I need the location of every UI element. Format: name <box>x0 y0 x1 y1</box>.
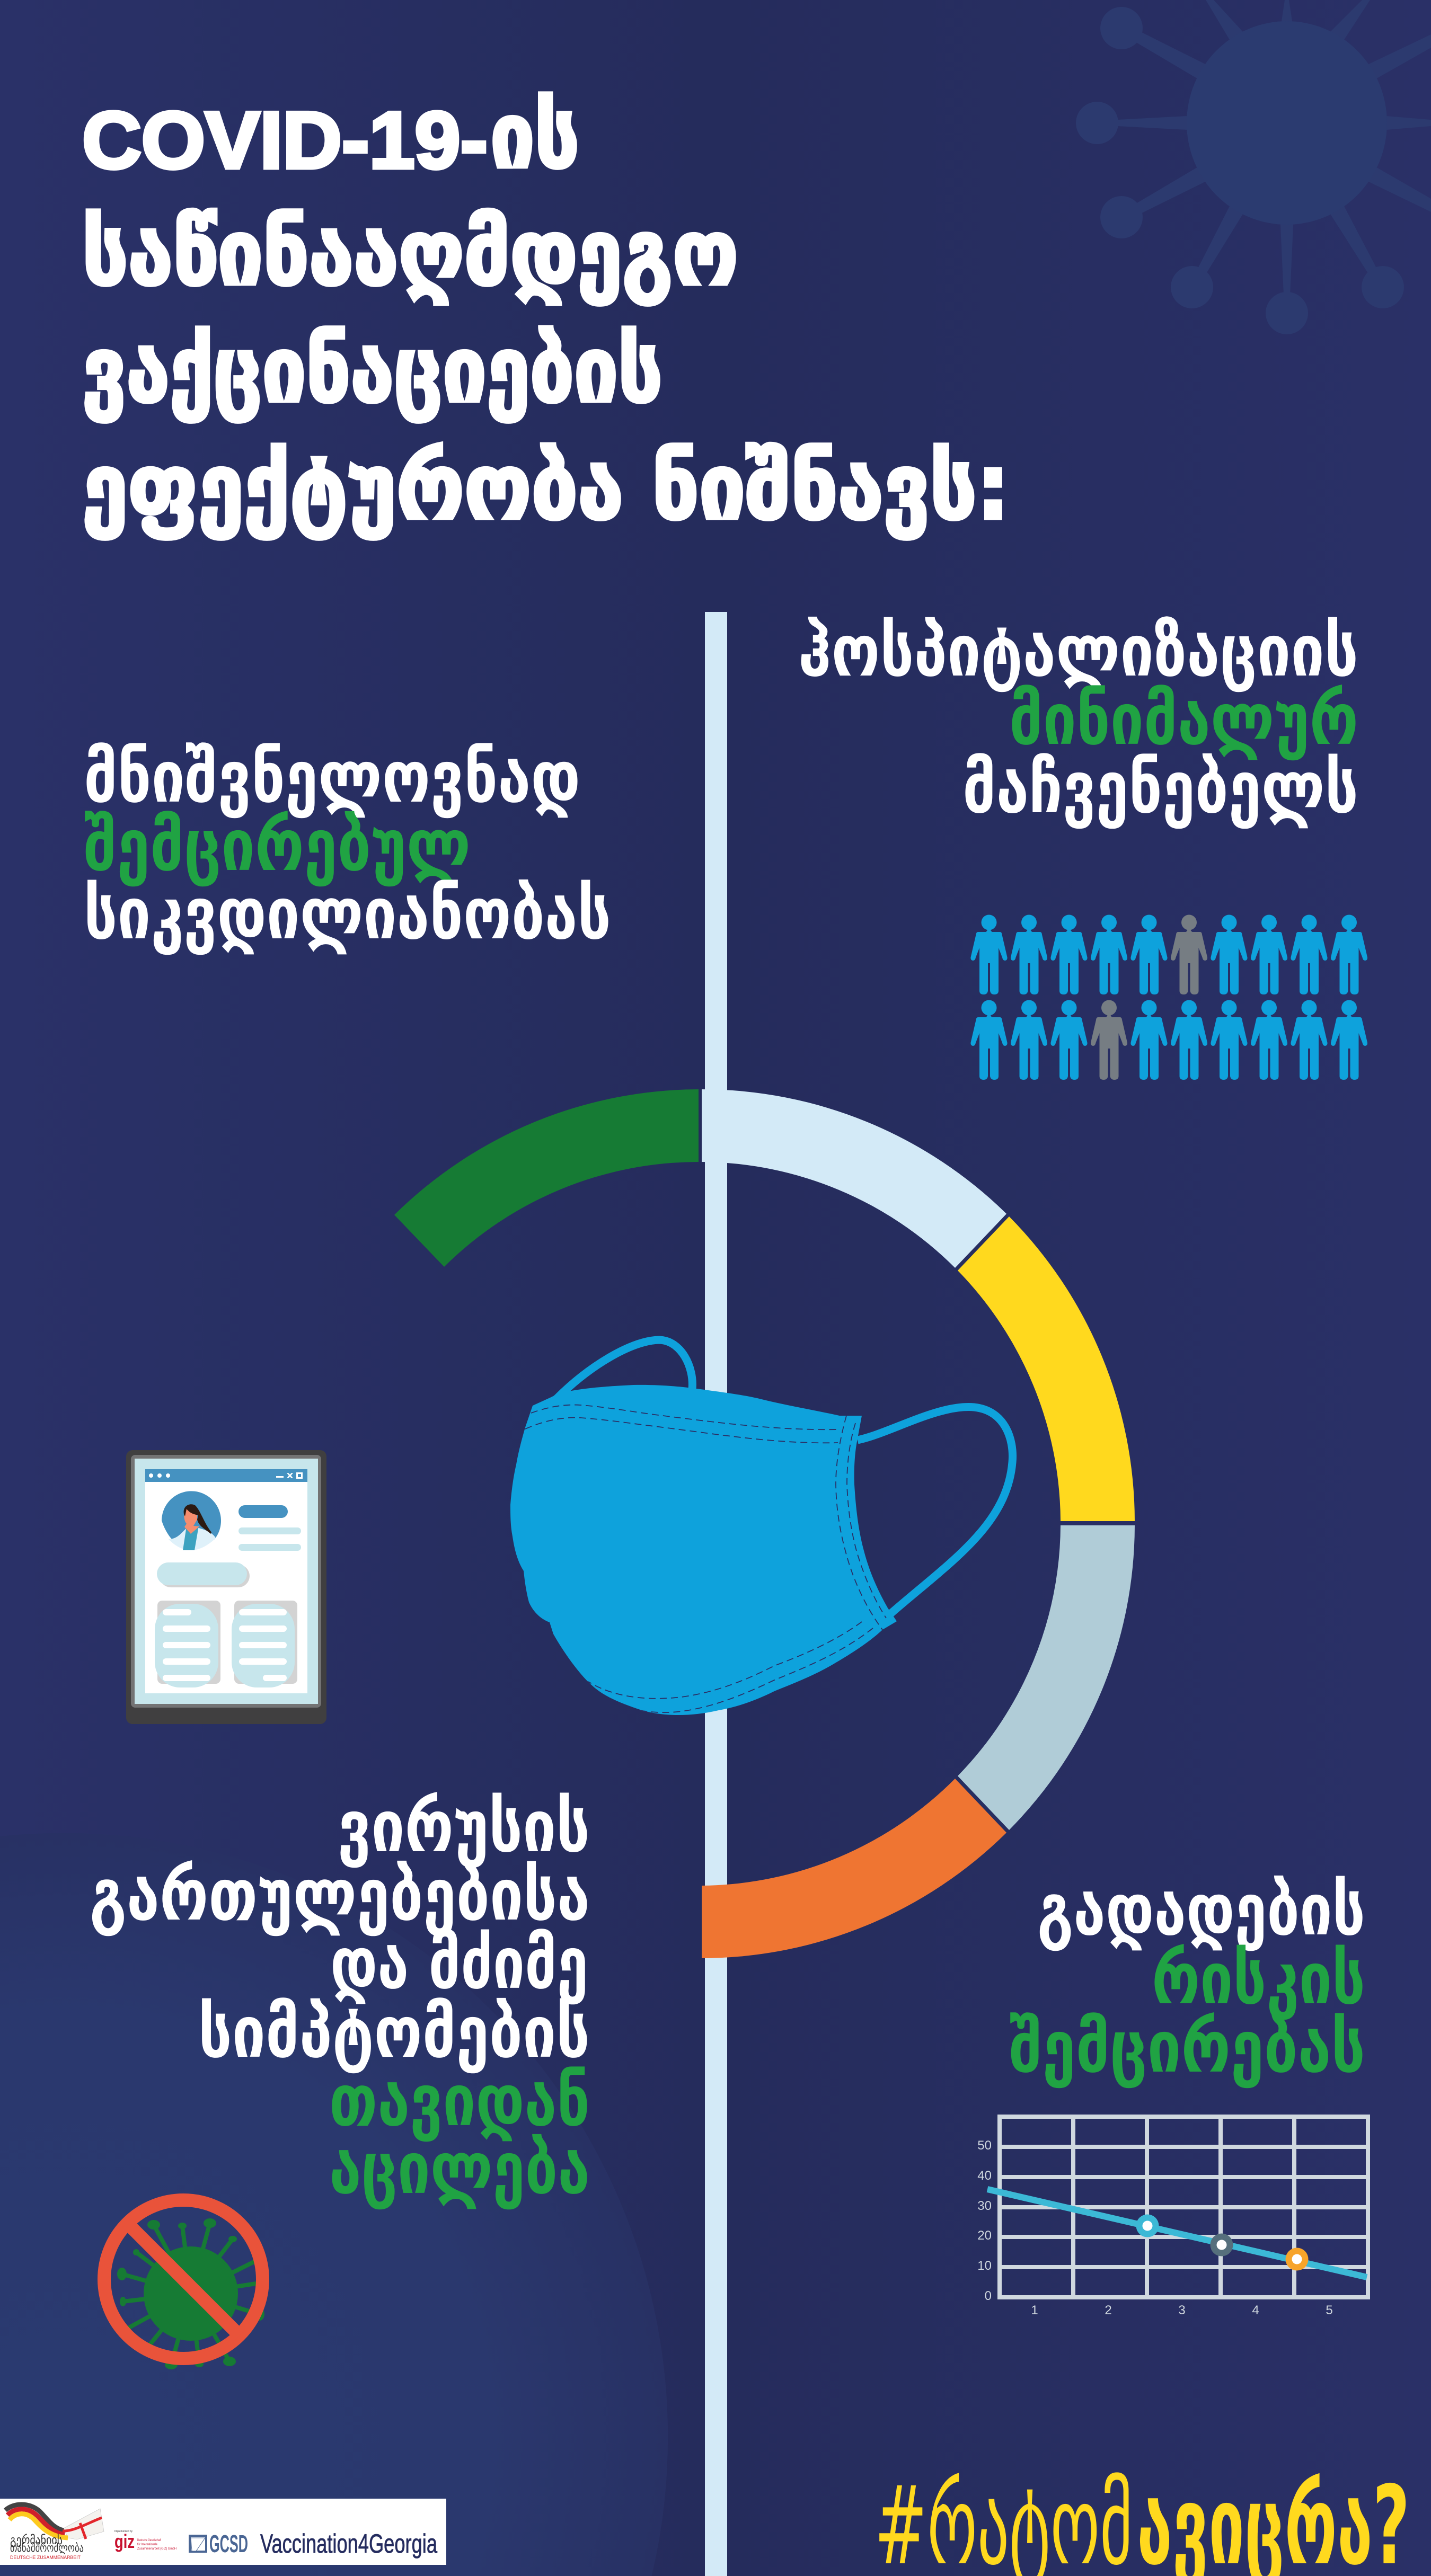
trend line <box>987 2189 1367 2277</box>
text block: mortality: სიკვდილიანობას <box>84 872 611 955</box>
background circle bottom left <box>0 1833 668 2576</box>
icon: people pictogram <box>970 914 1367 1080</box>
text block: avoid complications: აცილება <box>329 2127 590 2210</box>
axis labels: 3 <box>1178 2303 1186 2317</box>
text block: avoid complications: და მძიმე <box>330 1922 588 2005</box>
text block: transmission risk: შემცირებას <box>1009 2005 1365 2089</box>
logo: German cooperation <box>5 2504 104 2560</box>
text block: avoid complications: თავიდან <box>329 2059 590 2142</box>
text block: avoid complications: ვირუსის <box>338 1785 590 1868</box>
text block: avoid complications <box>90 1785 590 2210</box>
text block: avoid complications: გართულებებისა <box>90 1853 590 1937</box>
text block: avoid complications: სიმპტომების <box>198 1991 590 2074</box>
axis labels: 5 <box>1326 2303 1333 2317</box>
segment: orange <box>702 1779 1006 1958</box>
title: საწინააღმდეგო <box>82 201 738 306</box>
icon: background virus <box>1076 0 1431 334</box>
text block: transmission risk: რისკის <box>1152 1937 1365 2020</box>
data points <box>1136 2215 1308 2271</box>
logo: giz <box>114 2530 176 2552</box>
logo: GCSD <box>190 2530 248 2557</box>
logo: giz: Implemented by <box>114 2530 132 2533</box>
axis labels <box>977 2138 1333 2317</box>
logo: German cooperation: DEUTSCHE ZUSAMMENARBEIT <box>10 2555 81 2560</box>
logo: giz: Deutsche Gesellschaft <box>137 2539 161 2542</box>
axis labels: 40 <box>977 2169 992 2183</box>
axis labels: 2 <box>1105 2303 1112 2317</box>
segment: green <box>394 1089 699 1267</box>
central vertical bar <box>705 612 727 2576</box>
axis labels: 0 <box>985 2289 992 2303</box>
text block: hospitalization: მინიმალურ <box>1009 678 1358 761</box>
text block: mortality: შემცირებულ <box>84 804 471 887</box>
ring chart <box>394 1089 1135 1958</box>
segment: yellow <box>958 1216 1135 1521</box>
logo: giz: für Internationale <box>137 2543 158 2546</box>
axis labels: 10 <box>977 2259 992 2273</box>
axis labels: 30 <box>977 2199 992 2213</box>
title: ის <box>490 84 579 189</box>
segment: grey blue <box>958 1525 1135 1830</box>
title: ვაქცინაციების <box>82 318 662 423</box>
logo: German cooperation: თანამშრომლობა <box>10 2542 84 2555</box>
axis labels: 50 <box>977 2138 992 2153</box>
icon: crossed out virus <box>104 2200 264 2369</box>
icon: face mask <box>510 1340 1013 1715</box>
segment: light blue <box>702 1089 1006 1268</box>
text block: mortality <box>84 735 611 955</box>
logo: giz: giz <box>114 2530 135 2552</box>
logo: Vaccination4Georgia: Vaccination4Georgia <box>260 2529 437 2559</box>
axis labels: 1 <box>1031 2303 1038 2317</box>
line chart <box>977 2117 1368 2317</box>
text block: transmission risk <box>1009 1868 1365 2089</box>
logo: giz: Zusammenarbeit (GIZ) GmbH <box>137 2547 176 2551</box>
title: COVID-19- <box>82 95 488 185</box>
text block: transmission risk: გადადების <box>1037 1868 1365 1951</box>
axis labels: 20 <box>977 2228 992 2243</box>
logo: GCSD: GCSD <box>209 2530 248 2557</box>
text block: mortality: მნიშვნელოვნად <box>84 735 580 819</box>
icon: tablet with doctor profile <box>126 1450 326 1724</box>
text block: hospitalization: მაჩვენებელს <box>962 746 1358 829</box>
logo strip <box>0 2499 446 2565</box>
logo: German cooperation: გერმანიის <box>10 2533 63 2547</box>
title <box>82 84 1010 540</box>
title: ეფექტურობა ნიშნავს: <box>82 435 1010 540</box>
axis labels: 4 <box>1252 2303 1259 2317</box>
text block: hospitalization <box>798 609 1358 829</box>
